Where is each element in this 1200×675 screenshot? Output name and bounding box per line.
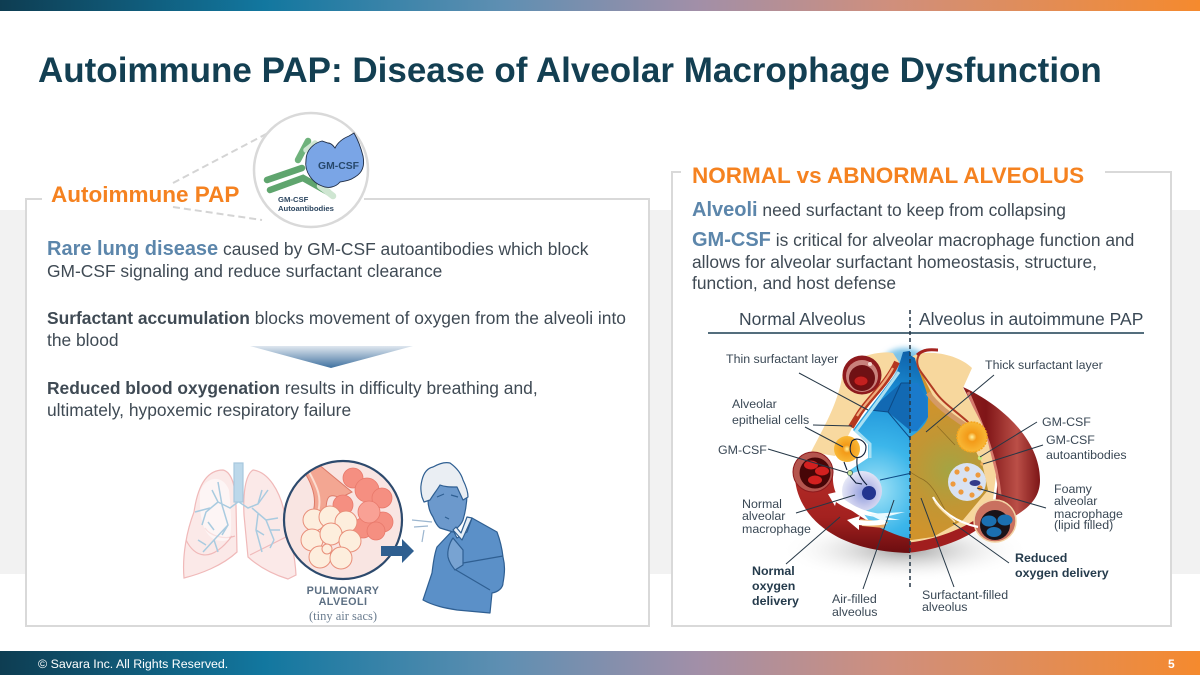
icon: GM-CSF protein — [306, 133, 364, 187]
bronchi — [195, 482, 280, 552]
diagram labels: (lipid filled) — [1054, 518, 1113, 532]
diagram labels: Normal — [752, 564, 795, 578]
diagram labels: Surfactant-filled — [922, 588, 1008, 602]
diagram labels: Air-filled — [832, 592, 877, 606]
diagram labels: Normal — [742, 497, 782, 511]
reduced oxygen arrows — [933, 497, 978, 527]
surfactant-filled air space — [905, 370, 988, 541]
text block: reduced blood oxygenation — [47, 378, 538, 420]
top vessel — [842, 356, 882, 394]
GM-CSF dot — [847, 470, 853, 476]
heading gap: right panel — [681, 165, 1105, 181]
sleeve line — [456, 556, 503, 590]
lungs illustration — [184, 463, 296, 579]
cream air sacs — [301, 506, 361, 569]
alveoli labels: PULMONARY — [307, 585, 380, 597]
alveolar epithelial cell — [957, 422, 987, 452]
breath lines — [412, 520, 432, 542]
cell boundaries — [870, 383, 912, 480]
large artery — [795, 474, 915, 553]
surfactant streak — [860, 519, 888, 528]
surfactant tan layer — [811, 352, 899, 456]
illustrations layer — [172, 112, 1144, 623]
face — [428, 477, 467, 532]
cream band — [905, 353, 996, 550]
person with breathing difficulty — [412, 463, 504, 613]
sweater — [423, 518, 504, 613]
GM-CSF + autoantibody dots — [978, 456, 982, 460]
diagram labels: Thin surfactant layer — [726, 352, 838, 366]
dashed divider between alveolus halves — [909, 310, 911, 590]
diagram labels: Thick surfactant layer — [985, 358, 1103, 372]
signalling arrows — [844, 439, 867, 485]
diagram labels: Reduced — [1015, 551, 1067, 565]
text block: GM-CSF — [692, 229, 1134, 293]
oxygen arrows — [828, 491, 905, 530]
page number: 5 — [1168, 657, 1175, 671]
heading: normal vs abnormal alveolus: NORMAL vs ABNORMAL ALVEOLUS — [692, 163, 1084, 188]
bottom wall — [910, 521, 976, 553]
pink wall strip — [928, 393, 965, 425]
hand — [448, 538, 463, 570]
diagram labels: alveolus — [832, 605, 877, 619]
heading: Autoimmune PAP: Autoimmune PAP — [51, 182, 239, 207]
text block: reduced blood oxygenation: ultimately, hypoxemic respiratory failure — [47, 400, 351, 420]
thin wall — [851, 362, 897, 427]
face features — [437, 494, 458, 519]
wall line — [916, 349, 969, 423]
outer wall — [963, 387, 1040, 516]
text block: rare lung disease: Rare lung disease caused by GM-CSF autoantibodies which block — [47, 238, 588, 260]
title: Autoimmune PAP: Disease of Alveolar Macrophage Dysfunction — [38, 51, 1102, 90]
diagram labels: alveolus — [922, 600, 967, 614]
diagram labels: oxygen — [752, 579, 795, 593]
macrophage — [842, 471, 882, 511]
diagram labels: Foamy — [1054, 482, 1093, 496]
blue air remnant — [910, 356, 928, 437]
protein label: GM-CSF — [318, 161, 359, 172]
reduced oxygen vessel — [974, 500, 1016, 542]
alveolus normal half — [793, 350, 915, 553]
diagram labels: epithelial cells — [732, 413, 809, 427]
trachea — [234, 463, 243, 502]
column heading: alveolus in autoimmune PAP: Alveolus in autoimmune PAP — [919, 309, 1143, 329]
text block: rare lung disease: GM-CSF signaling and reduce surfactant clearance — [47, 261, 442, 281]
diagram labels — [718, 352, 1127, 619]
icon: autoantibody — [267, 141, 333, 196]
alveoli labels — [307, 585, 380, 623]
alveolus abnormal half — [905, 350, 1040, 553]
column heading: normal alveolus: Normal Alveolus — [739, 309, 865, 329]
inner cell edge lines — [910, 426, 955, 510]
artery opening — [793, 452, 833, 492]
diagram labels: Alveolar — [732, 397, 777, 411]
alveolus top glow — [883, 348, 927, 376]
diagram labels: GM-CSF — [1042, 415, 1091, 429]
magnified pulmonary alveoli — [284, 461, 402, 579]
text block: surfactant accumulation: the blood — [47, 330, 119, 350]
air space — [848, 350, 910, 539]
text block: rare lung disease — [47, 238, 588, 281]
dark upper cell — [874, 384, 910, 430]
chevron arrow down — [250, 346, 413, 368]
airway — [306, 466, 353, 510]
foamy macrophage — [948, 463, 986, 501]
alveolus shadow — [780, 518, 1030, 582]
diagram labels: macrophage — [1054, 507, 1123, 521]
text block: GM-CSF: GM-CSF is critical for alveolar macrophage function and — [692, 229, 1134, 251]
diagram labels: delivery — [752, 594, 799, 608]
divider under column headings — [708, 332, 1144, 334]
hair — [421, 463, 468, 502]
panel: normal vs abnormal background — [671, 171, 1172, 627]
diagram labels: alveolar — [742, 509, 785, 523]
halo along wall — [856, 372, 899, 458]
panel: autoimmune PAP background — [25, 198, 650, 627]
antibody label line 2: Autoantibodies — [278, 204, 334, 213]
leader lines — [768, 373, 1046, 589]
tiny air sacs: (tiny air sacs) — [309, 609, 377, 623]
footer gradient bar — [0, 651, 1200, 675]
arrow to patient — [381, 539, 414, 563]
diagram labels: alveolar — [1054, 494, 1097, 508]
inner wall highlight — [968, 392, 1000, 495]
antibody label: GM-CSF — [278, 195, 309, 204]
zoom callout: GM-CSF and autoantibodies — [173, 113, 368, 227]
diagram labels: macrophage — [742, 522, 811, 536]
text block: GM-CSF: function, and host defense — [692, 273, 896, 293]
alveoli line: ALVEOLI — [319, 596, 367, 608]
text block: surfactant accumulation — [47, 308, 626, 350]
text block: alveoli: Alveoli need surfactant to keep from collapsing — [692, 199, 1066, 221]
diagram labels: autoantibodies — [1046, 448, 1127, 462]
text block: surfactant accumulation: Surfactant accumulation blocks movement of oxygen from the alveoli into — [47, 308, 626, 328]
diagram labels: GM-CSF — [718, 443, 767, 457]
collar — [453, 517, 472, 540]
heading gap: left panel — [42, 190, 364, 206]
top gradient bar — [0, 0, 1200, 11]
text block: GM-CSF: allows for alveolar surfactant homeostasis, structure, — [692, 252, 1097, 272]
text block: reduced blood oxygenation: Reduced blood oxygenation results in difficulty breathing and, — [47, 378, 538, 398]
diagram labels: GM-CSF — [1046, 433, 1095, 447]
diagram labels: oxygen delivery — [1015, 566, 1109, 580]
pink air sacs — [333, 468, 393, 540]
copyright: © Savara Inc. All Rights Reserved. — [38, 657, 228, 671]
alveolar epithelial cell — [834, 436, 860, 462]
grey background band — [0, 210, 1200, 574]
